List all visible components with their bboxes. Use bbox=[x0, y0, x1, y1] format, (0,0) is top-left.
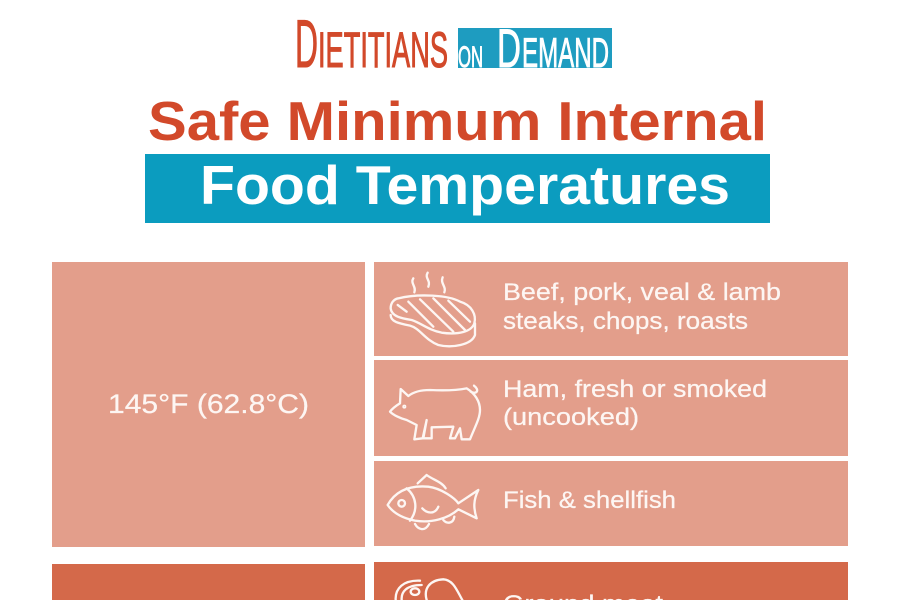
label: ham, fresh or smoked: (uncooked) bbox=[503, 404, 639, 431]
label: fish and shellfish: Fish & shellfish bbox=[503, 487, 676, 514]
row: ham bbox=[374, 360, 848, 456]
logo: Dietitians on Demand: D bbox=[497, 17, 521, 79]
panel: 145°F temperature: 145°F (62.8°C) bbox=[108, 389, 309, 419]
logo: Dietitians on Demand bbox=[295, 6, 612, 82]
row: ground meat (cropped) bbox=[374, 562, 848, 600]
icon: pig bbox=[390, 386, 480, 439]
icon: ground meat (cropped) bbox=[396, 579, 462, 600]
panel: next temperature (cropped) bbox=[52, 564, 365, 600]
label: steaks, chops, roasts bbox=[503, 279, 781, 335]
logo: Dietitians on Demand: D bbox=[295, 6, 318, 82]
label: steaks, chops, roasts: steaks, chops, roasts bbox=[503, 308, 748, 335]
title line 1: Safe Minimum Internal bbox=[148, 90, 767, 152]
icon: fish bbox=[388, 475, 478, 529]
logo: Dietitians on Demand: ON bbox=[458, 41, 483, 74]
logo: Dietitians on Demand: IETITIANS bbox=[318, 22, 448, 78]
panel: 145°F temperature bbox=[52, 262, 365, 547]
label: steaks, chops, roasts: Beef, pork, veal & lamb bbox=[503, 279, 781, 306]
row: beef, pork, veal and lamb bbox=[374, 262, 848, 356]
label: ham, fresh or smoked: Ham, fresh or smoked bbox=[503, 376, 767, 403]
logo: Dietitians on Demand: EMAND bbox=[522, 29, 609, 76]
title banner: Food Temperatures bbox=[200, 154, 730, 216]
row: fish and shellfish bbox=[374, 461, 848, 546]
label: ham, fresh or smoked bbox=[503, 376, 767, 431]
icon: steak bbox=[391, 273, 475, 346]
